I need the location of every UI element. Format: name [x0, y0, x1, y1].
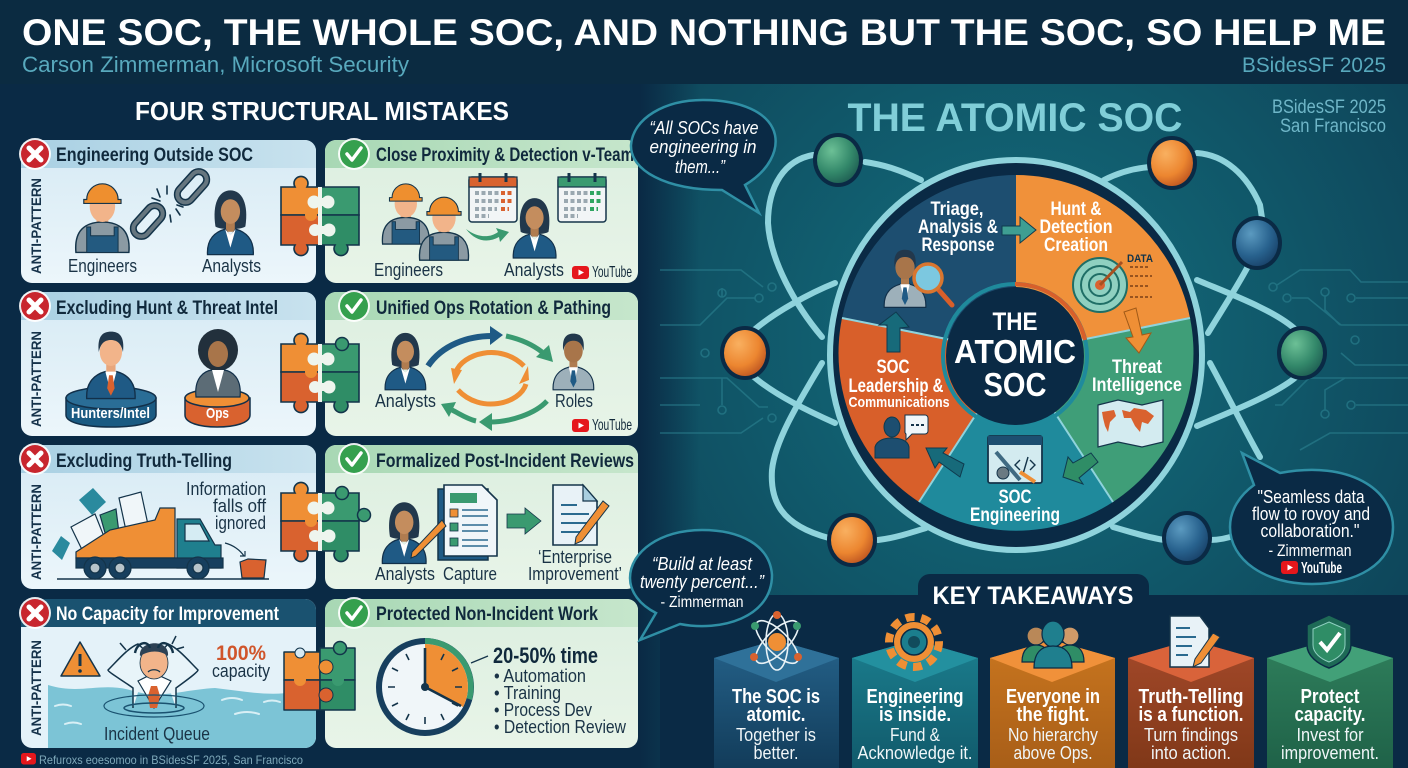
panel: row 3 fix: [325, 443, 638, 589]
icon: drowning analyst: [104, 636, 204, 717]
card: soc is atomic: better.: [754, 743, 798, 763]
icon: report and pencil: [553, 485, 609, 545]
text: hunt: Creation: [1044, 235, 1108, 256]
annotation: Information: [186, 479, 266, 499]
youtube mark: YouTube: [592, 264, 632, 281]
callout: build at least twenty percent: [630, 530, 772, 640]
atom balls: [720, 133, 1327, 567]
panel: row 2 fix: [325, 290, 638, 436]
label: Capture: [443, 564, 497, 584]
header bar: [0, 0, 1408, 84]
icon: calendar red: [469, 173, 517, 222]
event tag: [1272, 97, 1386, 137]
heading: Formalized Post-Incident Reviews: [376, 451, 634, 472]
panel: row 4 fix: [325, 597, 638, 748]
stat: 100%: 100%: [216, 642, 266, 665]
card: truth-telling: into action.: [1151, 743, 1231, 763]
icon: calendar green: [558, 173, 606, 222]
panel: row 3 anti-pattern: [19, 443, 316, 589]
icon: analyst: [207, 190, 253, 255]
callout: seamless data flow: "Seamless data: [1258, 487, 1365, 507]
icon: x: [19, 290, 51, 322]
text: hunt: [1040, 199, 1112, 256]
card: truth-telling: Truth-Telling: [1138, 686, 1244, 708]
card: truth-telling: is a function.: [1138, 704, 1244, 726]
list: • Detection Review: [494, 717, 627, 737]
card: engineering inside: Fund &: [890, 725, 940, 745]
icon: puzzle row 3: [281, 482, 370, 562]
icon: broken chain: [130, 168, 210, 240]
icon: check: [338, 443, 370, 475]
youtube mark: [572, 264, 632, 281]
text: hunt: Hunt &: [1050, 199, 1102, 220]
side label: ANTI-PATTERN: [28, 178, 44, 274]
icon: analyst: [382, 502, 426, 564]
text: leadership: [848, 357, 950, 411]
card: engineering inside: [852, 617, 978, 768]
icon: check: [338, 597, 370, 629]
annotation: ignored: [215, 513, 266, 533]
callout: all socs have engineering: them...”: [675, 157, 726, 177]
label: Roles: [555, 391, 593, 411]
card: soc is atomic: Together is: [736, 725, 816, 745]
card: truth-telling: Turn findings: [1144, 725, 1238, 745]
icon: analyst: [513, 198, 556, 258]
event tag: BSidesSF 2025: [1272, 97, 1386, 118]
text: hunt: Detection: [1040, 217, 1112, 238]
heading: No Capacity for Improvement: [56, 604, 280, 625]
label: ‘Enterprise: [538, 547, 612, 567]
icon: engineer: [76, 184, 129, 252]
icon: puzzle row 2: [281, 333, 359, 413]
callout: all socs have engineering: engineering in: [650, 137, 756, 157]
heading: Excluding Truth-Telling: [56, 451, 232, 472]
stat: 20-50% time: 20-50% time: [493, 643, 598, 668]
icon: shield: [1307, 615, 1351, 668]
card: engineering inside: Acknowledge it.: [858, 743, 972, 763]
label: Analysts: [375, 391, 436, 411]
text: triage: [918, 199, 998, 256]
text: leadership: Leadership &: [848, 376, 944, 397]
arrow: [466, 228, 509, 242]
text: triage: Response: [922, 235, 994, 256]
wedge: hunt: [1016, 175, 1190, 353]
card: protect capacity: Invest for: [1296, 725, 1364, 745]
author: Carson Zimmerman, Microsoft Security: [22, 52, 409, 77]
icon: gear: [889, 617, 939, 667]
label: Engineers: [68, 256, 137, 276]
callout: all socs have engineering: “All SOCs have: [650, 118, 758, 138]
text: soc engineering: [970, 487, 1060, 526]
icon: document with pencil: [1170, 616, 1220, 667]
icon: code window: [988, 436, 1042, 483]
callout: seamless data flow: [1230, 453, 1393, 584]
wheel: atomic soc: [830, 160, 1202, 550]
list: [494, 666, 627, 737]
arrow: threat to engineering: [1063, 453, 1098, 484]
icon: radar data: DATA: [1127, 253, 1153, 265]
card: engineering inside: is inside.: [879, 704, 951, 726]
arrow: triage to hunt: [1002, 217, 1036, 243]
callout: seamless data flow: - Zimmerman: [1268, 541, 1352, 560]
label: [528, 547, 622, 584]
callout: all socs have engineering: [631, 100, 776, 213]
card: soc is atomic: atomic.: [746, 704, 806, 726]
list: • Automation: [494, 666, 586, 686]
icon: puzzle row 4: [284, 642, 355, 710]
label: Analysts: [504, 260, 564, 280]
icon: x: [19, 597, 51, 629]
side label: ANTI-PATTERN: [28, 640, 44, 736]
circuit traces left: [660, 270, 776, 433]
list: • Process Dev: [494, 700, 592, 720]
heading: Protected Non-Incident Work: [376, 604, 598, 625]
background: left dark panel: [0, 84, 700, 768]
card: everyone in the fight: No hierarchy: [1008, 725, 1098, 745]
icon: warning: [61, 642, 100, 676]
arrow: [507, 508, 541, 534]
core: SOC: [984, 366, 1046, 403]
text: threat: [1092, 357, 1182, 396]
card: soc is atomic: [714, 611, 839, 768]
text: leadership: SOC: [876, 357, 910, 378]
card: protect capacity: [1267, 615, 1393, 768]
card: everyone in the fight: [990, 621, 1115, 768]
annotation: falls off: [213, 496, 267, 516]
core: THE: [992, 308, 1038, 336]
heading: Engineering Outside SOC: [56, 145, 253, 166]
podium: hunters: Hunters/Intel: [71, 405, 150, 422]
icon: atom: [749, 611, 805, 670]
callout: seamless data flow: YouTube: [1301, 560, 1342, 577]
icon: leader with speech bubble: [875, 415, 928, 458]
arrow: engineering to leadership: [926, 448, 964, 477]
card: protect capacity: improvement.: [1281, 743, 1379, 763]
text: threat: Threat: [1112, 357, 1163, 378]
text: soc engineering: SOC: [998, 487, 1032, 508]
event tag: San Francisco: [1280, 116, 1386, 137]
panel: row 1 fix: [325, 138, 638, 283]
callout: build at least twenty percent: twenty percent...”: [640, 572, 765, 592]
arrows: rotation: [428, 326, 553, 431]
youtube mark: YouTube: [592, 417, 632, 434]
card: engineering inside: Engineering: [866, 686, 964, 708]
circuit traces right: [1269, 270, 1408, 450]
label: Analysts: [375, 564, 435, 584]
orbits: [754, 153, 1296, 540]
text: threat: Intelligence: [1092, 375, 1182, 396]
side label: ANTI-PATTERN: [28, 484, 44, 580]
event: BSidesSF 2025: [1242, 54, 1386, 77]
wedge: threat intel: [1016, 318, 1193, 502]
label: Improvement’: [528, 564, 622, 584]
list: • Training: [494, 683, 561, 703]
podium: ops: Ops: [206, 405, 229, 422]
youtube mark: [572, 417, 632, 434]
card: everyone in the fight: Everyone in: [1006, 686, 1100, 708]
icon: world map: [1098, 400, 1163, 447]
wedge: triage: [842, 175, 1016, 353]
heading: Close Proximity & Detection v-Team: [376, 145, 634, 166]
arrow: leadership to triage: [879, 312, 909, 352]
water highlights: [55, 698, 280, 724]
card: protect capacity: capacity.: [1294, 704, 1366, 726]
icon: puzzle row 1: [281, 176, 359, 256]
callout: seamless data flow: flow to rovoy and: [1252, 504, 1370, 524]
card: protect capacity: Protect: [1300, 686, 1360, 708]
core: [943, 284, 1087, 428]
stat label: capacity: [212, 661, 270, 681]
title: ONE SOC, THE WHOLE SOC, AND NOTHING BUT THE SOC, SO HELP ME: [22, 12, 1386, 53]
wedge: soc engineering: [919, 353, 1113, 531]
text: triage: Analysis &: [918, 217, 998, 238]
icon: capture form: [411, 485, 497, 560]
arrow: hunt to threat: [1124, 308, 1151, 353]
card: everyone in the fight: the fight.: [1016, 704, 1090, 726]
core: ATOMIC: [954, 333, 1076, 370]
heading: the atomic soc: THE ATOMIC SOC: [848, 96, 1182, 140]
icon: engineers: [382, 184, 469, 260]
icon: check: [338, 290, 370, 322]
side label: ANTI-PATTERN: [28, 331, 44, 427]
heading: KEY TAKEAWAYS: [932, 582, 1134, 610]
label: Analysts: [202, 256, 261, 276]
card: everyone in the fight: above Ops.: [1014, 743, 1092, 763]
podium: ops: [185, 329, 250, 427]
panel: row 1 anti-pattern: [19, 138, 316, 283]
wedge: leadership: [839, 318, 1016, 502]
text: triage: Triage,: [930, 199, 984, 220]
panel: key takeaways: [660, 574, 1408, 768]
card: soc is atomic: The SOC is: [732, 686, 820, 708]
heading: four structural mistakes: FOUR STRUCTURAL MISTAKES: [135, 96, 509, 126]
panel: row 2 anti-pattern: [19, 290, 316, 436]
icon: x: [19, 138, 51, 170]
icon: analyst: [385, 333, 426, 390]
icon: x: [19, 443, 51, 475]
heading: Excluding Hunt & Threat Intel: [56, 298, 278, 319]
callout: build at least twenty percent: - Zimmerman: [660, 594, 744, 611]
icon: check: [338, 138, 370, 170]
icon: team: [1022, 621, 1084, 668]
water: [48, 685, 316, 748]
heading: Unified Ops Rotation & Pathing: [376, 298, 611, 319]
icon: analyst with magnifier: [884, 250, 952, 307]
icon: truck dumping papers: [52, 488, 269, 579]
annotation: [186, 479, 267, 533]
callout: seamless data flow: collaboration.": [1260, 521, 1360, 541]
label: Incident Queue: [104, 724, 210, 744]
label: Engineers: [374, 260, 443, 280]
podium: hunters: [66, 332, 156, 427]
icon: role person: [553, 334, 594, 390]
text: soc engineering: Engineering: [970, 505, 1060, 526]
callout: build at least twenty percent: “Build at least: [652, 554, 753, 574]
card: truth-telling: [1128, 616, 1254, 768]
text: leadership: Communications: [848, 394, 950, 411]
panel: row 4 anti-pattern: [19, 597, 316, 748]
icon: clock: [376, 638, 488, 736]
footer credit: Refuroxs eoesomoo in BSidesSF 2025, San Francisco: [39, 753, 303, 767]
icon: radar data: [1073, 253, 1153, 312]
